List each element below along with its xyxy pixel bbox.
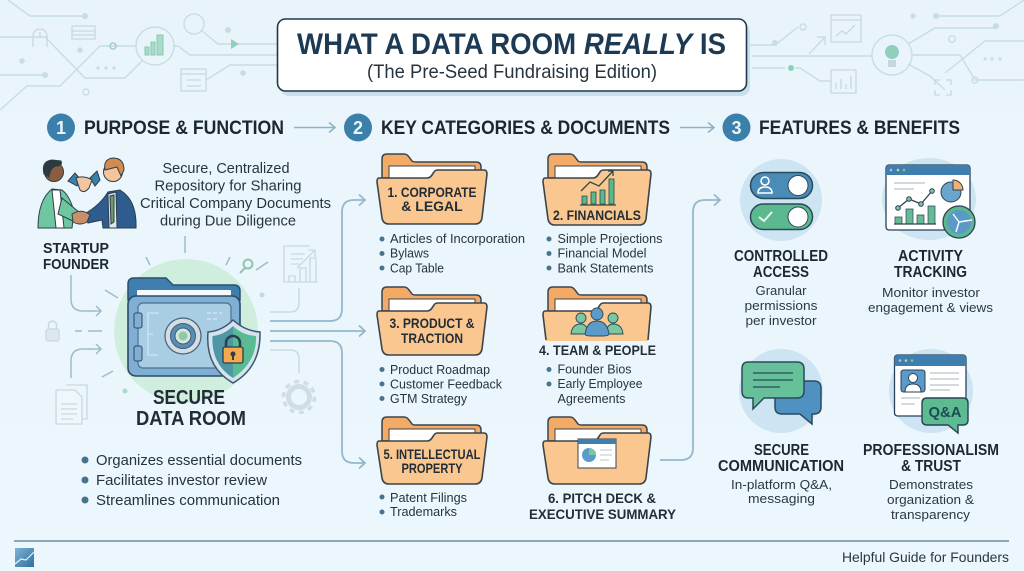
folder 6: pitch deck (543, 417, 651, 484)
icon: growth chart in folder (580, 171, 616, 205)
list: financial documents: Bank Statements (558, 262, 654, 276)
folder 5: intellectual property: PROPERTY (402, 460, 463, 476)
text: definition: during Due Diligence (160, 212, 296, 230)
folder 2: financials: 2. FINANCIALS (553, 207, 641, 223)
icon: documents faint (56, 385, 87, 424)
text: professionalism description: organization & (887, 492, 974, 507)
text: secure communication description (731, 477, 832, 506)
list: team documents (546, 362, 643, 406)
section header 2 (344, 114, 670, 142)
label: startup founder (43, 240, 109, 273)
label: pitch deck and executive summary: 6. PITCH DECK & (548, 490, 656, 506)
icon: padlock faint (46, 321, 59, 341)
arrow: section 2 to 3 (680, 122, 714, 132)
section header 1: 1 (56, 118, 66, 138)
arrow: folders to features (660, 194, 720, 460)
text: definition: Critical Company Documents (140, 195, 331, 212)
label: secure data room: SECURE (153, 387, 225, 409)
icon: chat bubbles (739, 349, 823, 433)
decorative circuit background: right (747, 0, 1024, 95)
footer text: Helpful Guide for Founders (842, 549, 1009, 565)
label: secure data room: DATA ROOM (136, 408, 246, 430)
icon: gear faint (284, 382, 314, 412)
heading: controlled access: ACCESS (753, 264, 809, 281)
list: team documents: Founder Bios (558, 362, 632, 376)
icon: magnifier (240, 260, 252, 273)
section header 3 (722, 114, 960, 142)
label: startup founder: STARTUP (43, 240, 109, 257)
folder 4: team and people (543, 287, 651, 341)
decorative circuit background: left (0, 0, 277, 110)
list: product documents: GTM Strategy (390, 392, 468, 406)
section header 1 (47, 114, 284, 142)
heading: secure communication: COMMUNICATION (718, 458, 844, 475)
text: controlled access description (744, 283, 818, 328)
list: financial documents: Simple Projections (558, 232, 662, 246)
heading: activity tracking (894, 248, 967, 281)
list: corporate documents (380, 232, 525, 276)
icon: shield with padlock (208, 320, 260, 383)
heading: secure communication (718, 442, 844, 475)
label: startup founder: FOUNDER (43, 256, 109, 273)
text: secure communication description: messaging (748, 491, 815, 506)
heading: controlled access (734, 248, 828, 281)
list: product documents: Product Roadmap (390, 363, 490, 377)
folder 1: corporate and legal (377, 154, 487, 224)
arrow: section 1 to 2 (294, 122, 335, 132)
folder 3: product and traction: TRACTION (401, 330, 463, 346)
icon: founder and investor handshake (38, 158, 136, 228)
heading: professionalism and trust: & TRUST (901, 458, 961, 475)
folder 5: intellectual property (377, 417, 487, 484)
text: controlled access description: Granular (756, 283, 807, 298)
folder 3: product and traction: 3. PRODUCT & (390, 315, 474, 331)
section header 1: PURPOSE & FUNCTION (84, 117, 284, 139)
folder 1: corporate and legal: & LEGAL (401, 198, 463, 214)
heading: activity tracking: ACTIVITY (898, 248, 963, 265)
text: definition: Secure, Centralized (162, 160, 290, 177)
subtitle: (The Pre-Seed Fundraising Edition) (367, 61, 657, 83)
folder 5: intellectual property: 5. INTELLECTUAL (384, 446, 481, 462)
list: corporate documents: Bylaws (390, 246, 429, 260)
text: controlled access description: per investor (746, 313, 817, 328)
list: data room benefits: Streamlines communication (96, 492, 280, 509)
list: intellectual property documents: Patent Filings (390, 491, 467, 505)
list: intellectual property documents: Trademarks (390, 505, 457, 519)
section header 3: FEATURES & BENEFITS (759, 117, 960, 139)
heading: controlled access: CONTROLLED (734, 248, 828, 265)
feature: professionalism and trust (863, 349, 999, 522)
heading: professionalism and trust (863, 442, 999, 475)
list: corporate documents: Cap Table (390, 262, 444, 276)
text: activity tracking description (868, 285, 994, 315)
title heading: WHAT A DATA ROOM REALLY IS (297, 28, 726, 61)
folder 2: financials (543, 154, 651, 225)
heading: professionalism and trust: PROFESSIONALISM (863, 442, 999, 459)
title box (278, 19, 750, 96)
icon: team in folder (571, 308, 623, 336)
icon: toggles (740, 159, 822, 241)
icon: slide with pie chart (578, 439, 616, 468)
feature: secure communication (718, 349, 844, 506)
list: product documents (380, 363, 503, 406)
feature: controlled access (734, 159, 828, 328)
list: product documents: Customer Feedback (390, 378, 503, 392)
icon: report chart faint (284, 246, 318, 282)
text: professionalism description: transparency (891, 507, 971, 522)
text: professionalism description: Demonstrates (889, 477, 974, 492)
footer logo (15, 548, 34, 567)
text: activity tracking description: engagement & views (868, 300, 994, 315)
list: data room benefits (82, 452, 302, 509)
list: data room benefits: Facilitates investor review (96, 472, 267, 489)
list: team documents: Agreements (558, 392, 626, 406)
arrows: data room to category folders (270, 194, 365, 468)
text: controlled access description: permissions (744, 298, 818, 313)
label: team and people: 4. TEAM & PEOPLE (539, 342, 656, 358)
list: corporate documents: Articles of Incorporation (390, 232, 525, 246)
arrows into data room (71, 236, 268, 378)
text: definition (140, 160, 331, 230)
list: financial documents (546, 232, 662, 276)
folder 1: corporate and legal: 1. CORPORATE (388, 184, 476, 200)
label: pitch deck and executive summary: EXECUTIVE SUMMARY (529, 506, 677, 522)
text: activity tracking description: Monitor investor (882, 285, 981, 300)
faint connector lines around data room (270, 288, 299, 373)
label: pitch deck and executive summary (529, 490, 677, 522)
icon: secure data room safe (114, 259, 264, 403)
folder 3: product and traction (377, 287, 487, 355)
text: definition: Repository for Sharing (154, 178, 302, 194)
list: financial documents: Financial Model (558, 246, 646, 260)
heading: activity tracking: TRACKING (894, 264, 967, 281)
text: professionalism description (887, 477, 974, 522)
section header 3: 3 (731, 118, 742, 138)
section header 2: 2 (353, 118, 363, 138)
section header 2: KEY CATEGORIES & DOCUMENTS (381, 117, 670, 139)
icon: profile window with Q&A bubble: Q&A (928, 404, 962, 421)
list: data room benefits: Organizes essential documents (96, 452, 302, 469)
heading: secure communication: SECURE (754, 442, 809, 459)
label: secure data room (136, 387, 246, 430)
list: team documents: Early Employee (558, 377, 643, 391)
icon: profile window with Q&A bubble (889, 349, 973, 433)
list: intellectual property documents (380, 491, 467, 519)
footer rule (14, 540, 1009, 542)
text: secure communication description: In-platform Q&A, (731, 477, 832, 492)
feature: activity tracking (868, 158, 994, 315)
icon: analytics window with clock (882, 158, 976, 240)
